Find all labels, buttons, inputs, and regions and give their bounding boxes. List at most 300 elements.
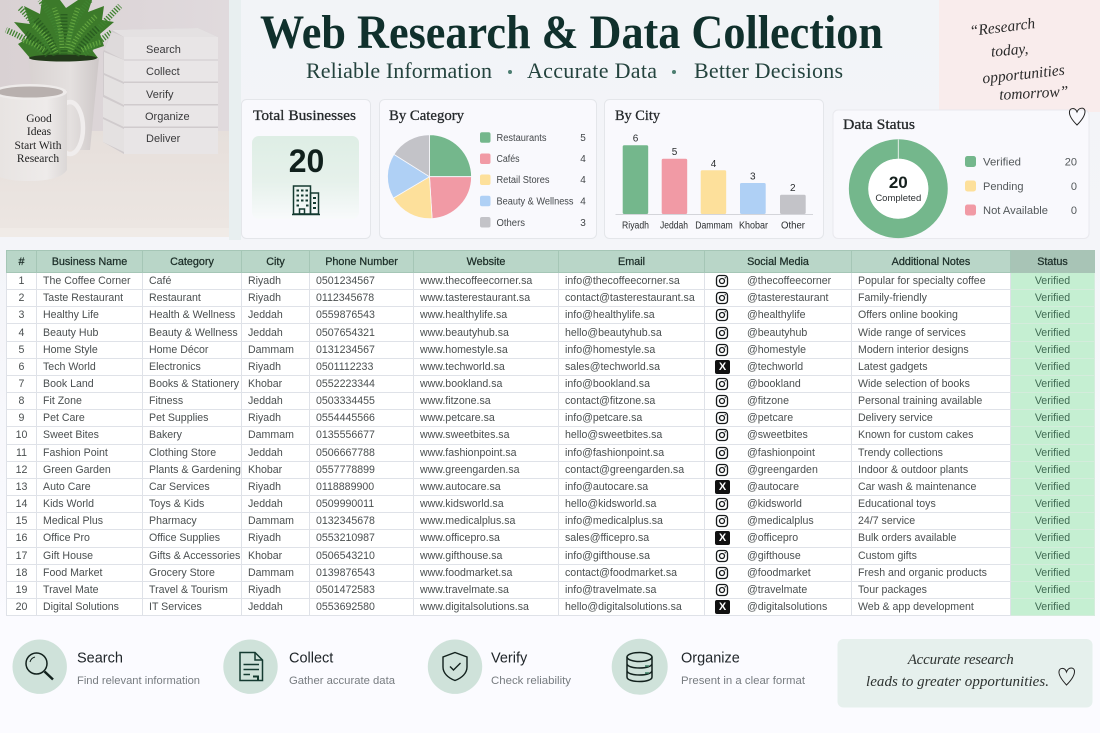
icon: magnifier bbox=[26, 653, 53, 680]
data table: info@petcare.sa bbox=[565, 412, 642, 424]
data table: hello@beautyhub.sa bbox=[565, 327, 662, 339]
data table: Wide range of services bbox=[858, 327, 966, 339]
data table: Social Media bbox=[747, 256, 809, 268]
panel: by category bbox=[380, 100, 596, 238]
donut chart: Completed bbox=[875, 193, 921, 204]
mug with text: Ideas bbox=[27, 126, 52, 138]
bar chart: Dammam bbox=[695, 220, 733, 232]
data table: @techworld bbox=[747, 361, 803, 373]
data table: Modern interior designs bbox=[858, 344, 969, 356]
data table: Verified bbox=[1035, 464, 1070, 476]
data table: @travelmate bbox=[747, 584, 807, 596]
mug with text: Good bbox=[26, 113, 52, 125]
data table: www.homestyle.sa bbox=[420, 344, 508, 356]
data table: Educational toys bbox=[858, 498, 936, 510]
data table: 0557778899 bbox=[316, 464, 375, 476]
data table: Toys & Kids bbox=[149, 498, 204, 510]
data table: Pharmacy bbox=[149, 515, 197, 527]
data table: Travel & Tourism bbox=[149, 584, 228, 596]
data table: 15 bbox=[16, 515, 27, 527]
data table: 19 bbox=[16, 584, 27, 596]
data table: Gift House bbox=[43, 550, 93, 562]
data table: Grocery Store bbox=[149, 567, 215, 579]
data table: info@thecoffeecorner.sa bbox=[565, 275, 680, 287]
step: collect: Collect bbox=[289, 650, 333, 666]
data table: www.petcare.sa bbox=[420, 412, 495, 424]
data table: Jeddah bbox=[248, 327, 283, 339]
bar chart: 4 bbox=[711, 159, 717, 170]
data table: Additional Notes bbox=[892, 256, 970, 268]
data table: www.tasterestaurant.sa bbox=[420, 292, 530, 304]
mug with text: Start With bbox=[15, 140, 62, 152]
data table: 0118889900 bbox=[316, 481, 374, 493]
data table: info@autocare.sa bbox=[565, 481, 648, 493]
panel: by category: By Category bbox=[389, 108, 465, 124]
data table: @tasterestaurant bbox=[747, 292, 828, 304]
data table: IT Services bbox=[149, 601, 202, 613]
data table: Travel Mate bbox=[43, 584, 99, 596]
data table: Health & Wellness bbox=[149, 309, 235, 321]
data table: hello@digitalsolutions.sa bbox=[565, 601, 682, 613]
data table: 20 bbox=[16, 601, 27, 613]
data table: Book Land bbox=[43, 378, 94, 390]
data table: Category bbox=[170, 256, 214, 268]
data table: 24/7 service bbox=[858, 515, 915, 527]
data table: @autocare bbox=[747, 481, 799, 493]
data table: Books & Stationery bbox=[149, 378, 239, 390]
pie legend: 5 bbox=[580, 133, 586, 144]
data table: Business Name bbox=[52, 256, 127, 268]
donut chart bbox=[859, 139, 938, 228]
panel: total businesses bbox=[242, 100, 370, 238]
data table: 10 bbox=[16, 429, 27, 441]
pie legend: 4 bbox=[580, 196, 586, 208]
data table: sales@fficepro.sa bbox=[565, 532, 649, 544]
data table: Jeddah bbox=[248, 309, 283, 321]
data table: @healthylife bbox=[747, 309, 805, 321]
data table: Verified bbox=[1035, 567, 1070, 579]
data table: # bbox=[18, 256, 24, 268]
pie chart bbox=[387, 135, 472, 219]
data table: contact@foodmarket.sa bbox=[565, 567, 677, 579]
data table: Fashion Point bbox=[43, 447, 108, 459]
data table: Beauty & Wellness bbox=[149, 327, 238, 339]
pie legend: Cafés bbox=[496, 154, 520, 165]
step: search bbox=[12, 640, 200, 694]
mug with text: Research bbox=[17, 153, 59, 165]
data table: Known for custom cakes bbox=[858, 429, 973, 441]
data table: Email bbox=[618, 256, 645, 268]
pie legend: Retail Stores bbox=[496, 175, 550, 186]
data table: Office Supplies bbox=[149, 532, 220, 544]
data table: City bbox=[266, 256, 285, 268]
title: Web Research & Data Collection bbox=[260, 6, 883, 59]
data table: 3 bbox=[19, 309, 24, 321]
data table: 0131234567 bbox=[316, 344, 375, 356]
pie legend: 4 bbox=[580, 154, 586, 165]
data table: www.digitalsolutions.sa bbox=[420, 601, 529, 613]
data table: www.sweetbites.sa bbox=[420, 429, 510, 441]
data table: Web & app development bbox=[858, 601, 974, 613]
data table: Gifts & Accessories bbox=[149, 550, 240, 562]
subtitle: Better Decisions bbox=[694, 58, 843, 83]
icon: heart bbox=[1069, 108, 1085, 125]
subtitle bbox=[306, 58, 843, 83]
donut legend: Verified bbox=[983, 156, 1021, 168]
data table: 11 bbox=[16, 447, 27, 459]
data table: Verified bbox=[1035, 344, 1070, 356]
book stack bbox=[103, 28, 218, 154]
data table: Fitness bbox=[149, 395, 183, 407]
data table: www.bookland.sa bbox=[420, 378, 502, 390]
data table: Offers online booking bbox=[858, 309, 958, 321]
data table: @fitzone bbox=[747, 395, 789, 407]
data table: www.fashionpoint.sa bbox=[420, 447, 517, 459]
data table: Verified bbox=[1035, 515, 1070, 527]
data table: Verified bbox=[1035, 481, 1070, 493]
book stack: Deliver bbox=[146, 133, 181, 145]
callout: closing message bbox=[838, 639, 1092, 708]
data table: 0507654321 bbox=[316, 327, 375, 339]
data table: www.greengarden.sa bbox=[420, 464, 520, 476]
data table: Taste Restaurant bbox=[43, 292, 123, 304]
data table: Verified bbox=[1035, 361, 1070, 373]
panel: total businesses: Total Businesses bbox=[253, 108, 356, 124]
donut chart: 20 bbox=[889, 173, 908, 192]
data table: Dammam bbox=[248, 515, 294, 527]
bar chart: 3 bbox=[750, 172, 756, 182]
icon: database bbox=[627, 652, 652, 682]
panel: by city bbox=[604, 100, 824, 238]
data table: Verified bbox=[1035, 378, 1070, 390]
step: search: Search bbox=[77, 650, 123, 666]
pie legend: Others bbox=[496, 218, 525, 229]
bar chart bbox=[616, 134, 813, 232]
data table: Pet Supplies bbox=[149, 412, 208, 424]
bar chart: 5 bbox=[672, 147, 678, 158]
data table: Verified bbox=[1035, 309, 1070, 321]
data table: Fresh and organic products bbox=[858, 567, 987, 579]
data table: 0506667788 bbox=[316, 447, 375, 459]
data table: Car Services bbox=[149, 481, 210, 493]
donut legend: 20 bbox=[1065, 156, 1077, 168]
donut legend: Pending bbox=[983, 181, 1024, 193]
handwritten quote: opportunities bbox=[982, 62, 1066, 87]
data table: X bbox=[719, 361, 726, 373]
step: organize bbox=[612, 639, 805, 695]
data table: @sweetbites bbox=[747, 429, 808, 441]
step: verify: Verify bbox=[491, 650, 528, 666]
data table: 0501112233 bbox=[316, 361, 373, 373]
data table: www.fitzone.sa bbox=[420, 395, 491, 407]
data table: @foodmarket bbox=[747, 567, 811, 579]
data table: Riyadh bbox=[248, 481, 281, 493]
pie legend: 4 bbox=[580, 175, 586, 186]
data table: Verified bbox=[1035, 498, 1070, 510]
data table: Riyadh bbox=[248, 584, 281, 596]
data table: @petcare bbox=[747, 412, 793, 424]
data table: 0112345678 bbox=[316, 292, 374, 304]
data table: contact@tasterestaurant.sa bbox=[565, 292, 695, 304]
data table: Healthy Life bbox=[43, 309, 99, 321]
data table: Khobar bbox=[248, 550, 282, 562]
data table: www.beautyhub.sa bbox=[420, 327, 509, 339]
step: search: Find relevant information bbox=[77, 675, 200, 687]
data table: @bookland bbox=[747, 378, 801, 390]
data table: Verified bbox=[1035, 429, 1070, 441]
data table: Riyadh bbox=[248, 361, 281, 373]
icon: document bbox=[240, 652, 262, 680]
data table: www.autocare.sa bbox=[420, 481, 501, 493]
data table: www.kidsworld.sa bbox=[420, 498, 504, 510]
data table: 0552223344 bbox=[316, 378, 375, 390]
data table: info@travelmate.sa bbox=[565, 584, 656, 596]
data table: Verified bbox=[1035, 412, 1070, 424]
data table: 9 bbox=[19, 412, 24, 424]
icon: building bbox=[292, 186, 320, 214]
data table: Green Garden bbox=[43, 464, 111, 476]
bar chart: Other bbox=[781, 220, 806, 232]
data table: @homestyle bbox=[747, 344, 806, 356]
data table: Khobar bbox=[248, 464, 282, 476]
data table: 13 bbox=[16, 481, 27, 493]
data table: 0135556677 bbox=[316, 429, 375, 441]
data table: Status bbox=[1037, 256, 1068, 268]
data table: Riyadh bbox=[248, 292, 281, 304]
data table: X bbox=[719, 601, 726, 613]
data table: Tech World bbox=[43, 361, 96, 373]
data table: 0503334455 bbox=[316, 395, 375, 407]
donut legend bbox=[965, 156, 1077, 217]
data table: Verified bbox=[1035, 601, 1070, 613]
panel: data status: Data Status bbox=[843, 117, 915, 133]
book stack: Collect bbox=[146, 66, 180, 78]
pie legend: Beauty & Wellness bbox=[496, 196, 574, 208]
data table: Restaurant bbox=[149, 292, 201, 304]
subtitle: Accurate Data bbox=[527, 58, 657, 83]
bar chart: Jeddah bbox=[660, 220, 688, 232]
data table: Popular for specialty coffee bbox=[858, 275, 986, 287]
data table: 0501234567 bbox=[316, 275, 375, 287]
data table: Khobar bbox=[248, 378, 282, 390]
data table: Café bbox=[149, 275, 171, 287]
handwritten quote bbox=[969, 15, 1069, 104]
callout: closing message: Accurate research bbox=[907, 652, 1014, 668]
data table: Plants & Gardening bbox=[149, 464, 241, 476]
data table: @medicalplus bbox=[747, 515, 814, 527]
data table: Riyadh bbox=[248, 532, 281, 544]
data table: 0139876543 bbox=[316, 567, 375, 579]
data table: 8 bbox=[19, 395, 24, 407]
data table: Jeddah bbox=[248, 447, 283, 459]
data table: www.travelmate.sa bbox=[420, 584, 509, 596]
handwritten quote: tomorrow” bbox=[999, 83, 1069, 104]
data table: 0501472583 bbox=[316, 584, 375, 596]
data table: Sweet Bites bbox=[43, 429, 99, 441]
data table: Clothing Store bbox=[149, 447, 216, 459]
data table: 0506543210 bbox=[316, 550, 375, 562]
step: collect: Gather accurate data bbox=[289, 675, 396, 687]
book stack: Organize bbox=[145, 111, 190, 123]
data table: 0553692580 bbox=[316, 601, 375, 613]
data table: www.gifthouse.sa bbox=[420, 550, 502, 562]
handwritten quote: “Research bbox=[969, 15, 1036, 40]
data table: @greengarden bbox=[747, 464, 818, 476]
panel: by city: By City bbox=[615, 108, 661, 124]
data table: Auto Care bbox=[43, 481, 91, 493]
data table: Jeddah bbox=[248, 601, 283, 613]
data table: Dammam bbox=[248, 429, 294, 441]
data table: X bbox=[719, 532, 726, 544]
data table: Pet Care bbox=[43, 412, 85, 424]
data table: Bakery bbox=[149, 429, 182, 441]
data table: @gifthouse bbox=[747, 550, 801, 562]
data table: Custom gifts bbox=[858, 550, 917, 562]
data table: Website bbox=[467, 256, 505, 268]
photo: desk with plant, mug and books bbox=[0, 0, 229, 237]
mug with text bbox=[0, 84, 83, 181]
pie legend: 3 bbox=[580, 218, 586, 229]
data table: Riyadh bbox=[248, 275, 281, 287]
data table: Personal training available bbox=[858, 395, 982, 407]
data table: Verified bbox=[1035, 292, 1070, 304]
data table: Indoor & outdoor plants bbox=[858, 464, 968, 476]
data table: @beautyhub bbox=[747, 327, 807, 339]
callout: closing message: leads to greater opportunities. bbox=[866, 674, 1049, 690]
data table: Wide selection of books bbox=[858, 378, 970, 390]
data table: 12 bbox=[16, 464, 27, 476]
data table: @officepro bbox=[747, 532, 798, 544]
data table: 16 bbox=[16, 532, 27, 544]
data table: sales@techworld.sa bbox=[565, 361, 660, 373]
data table: 0553210987 bbox=[316, 532, 375, 544]
data table: 0132345678 bbox=[316, 515, 375, 527]
data table: Beauty Hub bbox=[43, 327, 98, 339]
data table bbox=[6, 250, 1095, 616]
book stack: Search bbox=[146, 44, 181, 56]
data table: The Coffee Corner bbox=[43, 275, 131, 287]
data table: Trendy collections bbox=[858, 447, 943, 459]
data table: 17 bbox=[16, 550, 27, 562]
data table: info@homestyle.sa bbox=[565, 344, 655, 356]
bar chart: Khobar bbox=[739, 220, 769, 232]
step: organize: Organize bbox=[681, 650, 740, 666]
data table: @fashionpoint bbox=[747, 447, 815, 459]
data table: Dammam bbox=[248, 344, 294, 356]
data table: hello@sweetbites.sa bbox=[565, 429, 662, 441]
data table: 14 bbox=[16, 498, 27, 510]
step: organize: Present in a clear format bbox=[681, 675, 805, 687]
data table: Dammam bbox=[248, 567, 294, 579]
subtitle: Reliable Information bbox=[306, 58, 492, 83]
icon: shield bbox=[443, 652, 467, 680]
data table: Digital Solutions bbox=[43, 601, 119, 613]
data table: Medical Plus bbox=[43, 515, 103, 527]
data table: contact@fitzone.sa bbox=[565, 395, 655, 407]
data table: www.thecoffeecorner.sa bbox=[420, 275, 532, 287]
donut legend: 0 bbox=[1071, 181, 1077, 193]
data table: 1 bbox=[19, 275, 24, 287]
data table: Phone Number bbox=[325, 256, 398, 268]
step: collect bbox=[223, 640, 396, 694]
data table: Home Style bbox=[43, 344, 98, 356]
data table: @kidsworld bbox=[747, 498, 802, 510]
data table: info@fashionpoint.sa bbox=[565, 447, 664, 459]
plant bbox=[6, 0, 120, 62]
data table: Home Décor bbox=[149, 344, 208, 356]
data table: Latest gadgets bbox=[858, 361, 928, 373]
data table: @digitalsolutions bbox=[747, 601, 827, 613]
data table: hello@kidsworld.sa bbox=[565, 498, 656, 510]
panel: total businesses: 20 bbox=[289, 143, 324, 179]
data table: 5 bbox=[19, 344, 24, 356]
data table: Car wash & maintenance bbox=[858, 481, 976, 493]
step: verify: Check reliability bbox=[491, 675, 572, 687]
data table: info@medicalplus.sa bbox=[565, 515, 663, 527]
data table: info@healthylife.sa bbox=[565, 309, 655, 321]
pie legend: Restaurants bbox=[496, 133, 546, 144]
data table: 0554445566 bbox=[316, 412, 375, 424]
step: verify bbox=[428, 640, 572, 694]
data table: www.foodmarket.sa bbox=[420, 567, 512, 579]
data table: 0509990011 bbox=[316, 498, 374, 510]
data table: Verified bbox=[1035, 327, 1070, 339]
data table: Electronics bbox=[149, 361, 201, 373]
data table: info@gifthouse.sa bbox=[565, 550, 650, 562]
data table: www.medicalplus.sa bbox=[420, 515, 515, 527]
data table: 0559876543 bbox=[316, 309, 375, 321]
data table: Verified bbox=[1035, 550, 1070, 562]
data table: Verified bbox=[1035, 532, 1070, 544]
data table: Riyadh bbox=[248, 412, 281, 424]
data table: www.techworld.sa bbox=[420, 361, 505, 373]
data table: Office Pro bbox=[43, 532, 90, 544]
bar chart: 2 bbox=[790, 183, 796, 194]
data table: Verified bbox=[1035, 395, 1070, 407]
data table: Tour packages bbox=[858, 584, 927, 596]
data table: Verified bbox=[1035, 447, 1070, 459]
data table: Jeddah bbox=[248, 498, 283, 510]
data table: 2 bbox=[19, 292, 24, 304]
data table: info@bookland.sa bbox=[565, 378, 650, 390]
data table: 4 bbox=[19, 327, 24, 339]
data table: Delivery service bbox=[858, 412, 933, 424]
book stack: Verify bbox=[146, 89, 174, 101]
data table: 18 bbox=[16, 567, 27, 579]
handwritten quote: today, bbox=[990, 40, 1029, 61]
data table: Kids World bbox=[43, 498, 94, 510]
data table: Verified bbox=[1035, 275, 1070, 287]
data table: Fit Zone bbox=[43, 395, 82, 407]
plant pot bbox=[28, 58, 99, 150]
data table: www.healthylife.sa bbox=[420, 309, 507, 321]
data table: 7 bbox=[19, 378, 24, 390]
data table: @thecoffeecorner bbox=[747, 275, 831, 287]
data table: X bbox=[719, 481, 726, 493]
donut legend: 0 bbox=[1071, 205, 1077, 217]
data table: contact@greengarden.sa bbox=[565, 464, 684, 476]
data table: 6 bbox=[19, 361, 24, 373]
data table: Jeddah bbox=[248, 395, 283, 407]
donut legend: Not Available bbox=[983, 205, 1048, 217]
data table: Family-friendly bbox=[858, 292, 927, 304]
data table: Verified bbox=[1035, 584, 1070, 596]
data table: Food Market bbox=[43, 567, 102, 579]
data table: Bulk orders available bbox=[858, 532, 956, 544]
panel: data status bbox=[833, 110, 1089, 238]
data table: www.officepro.sa bbox=[420, 532, 500, 544]
bar chart: Riyadh bbox=[622, 220, 649, 232]
